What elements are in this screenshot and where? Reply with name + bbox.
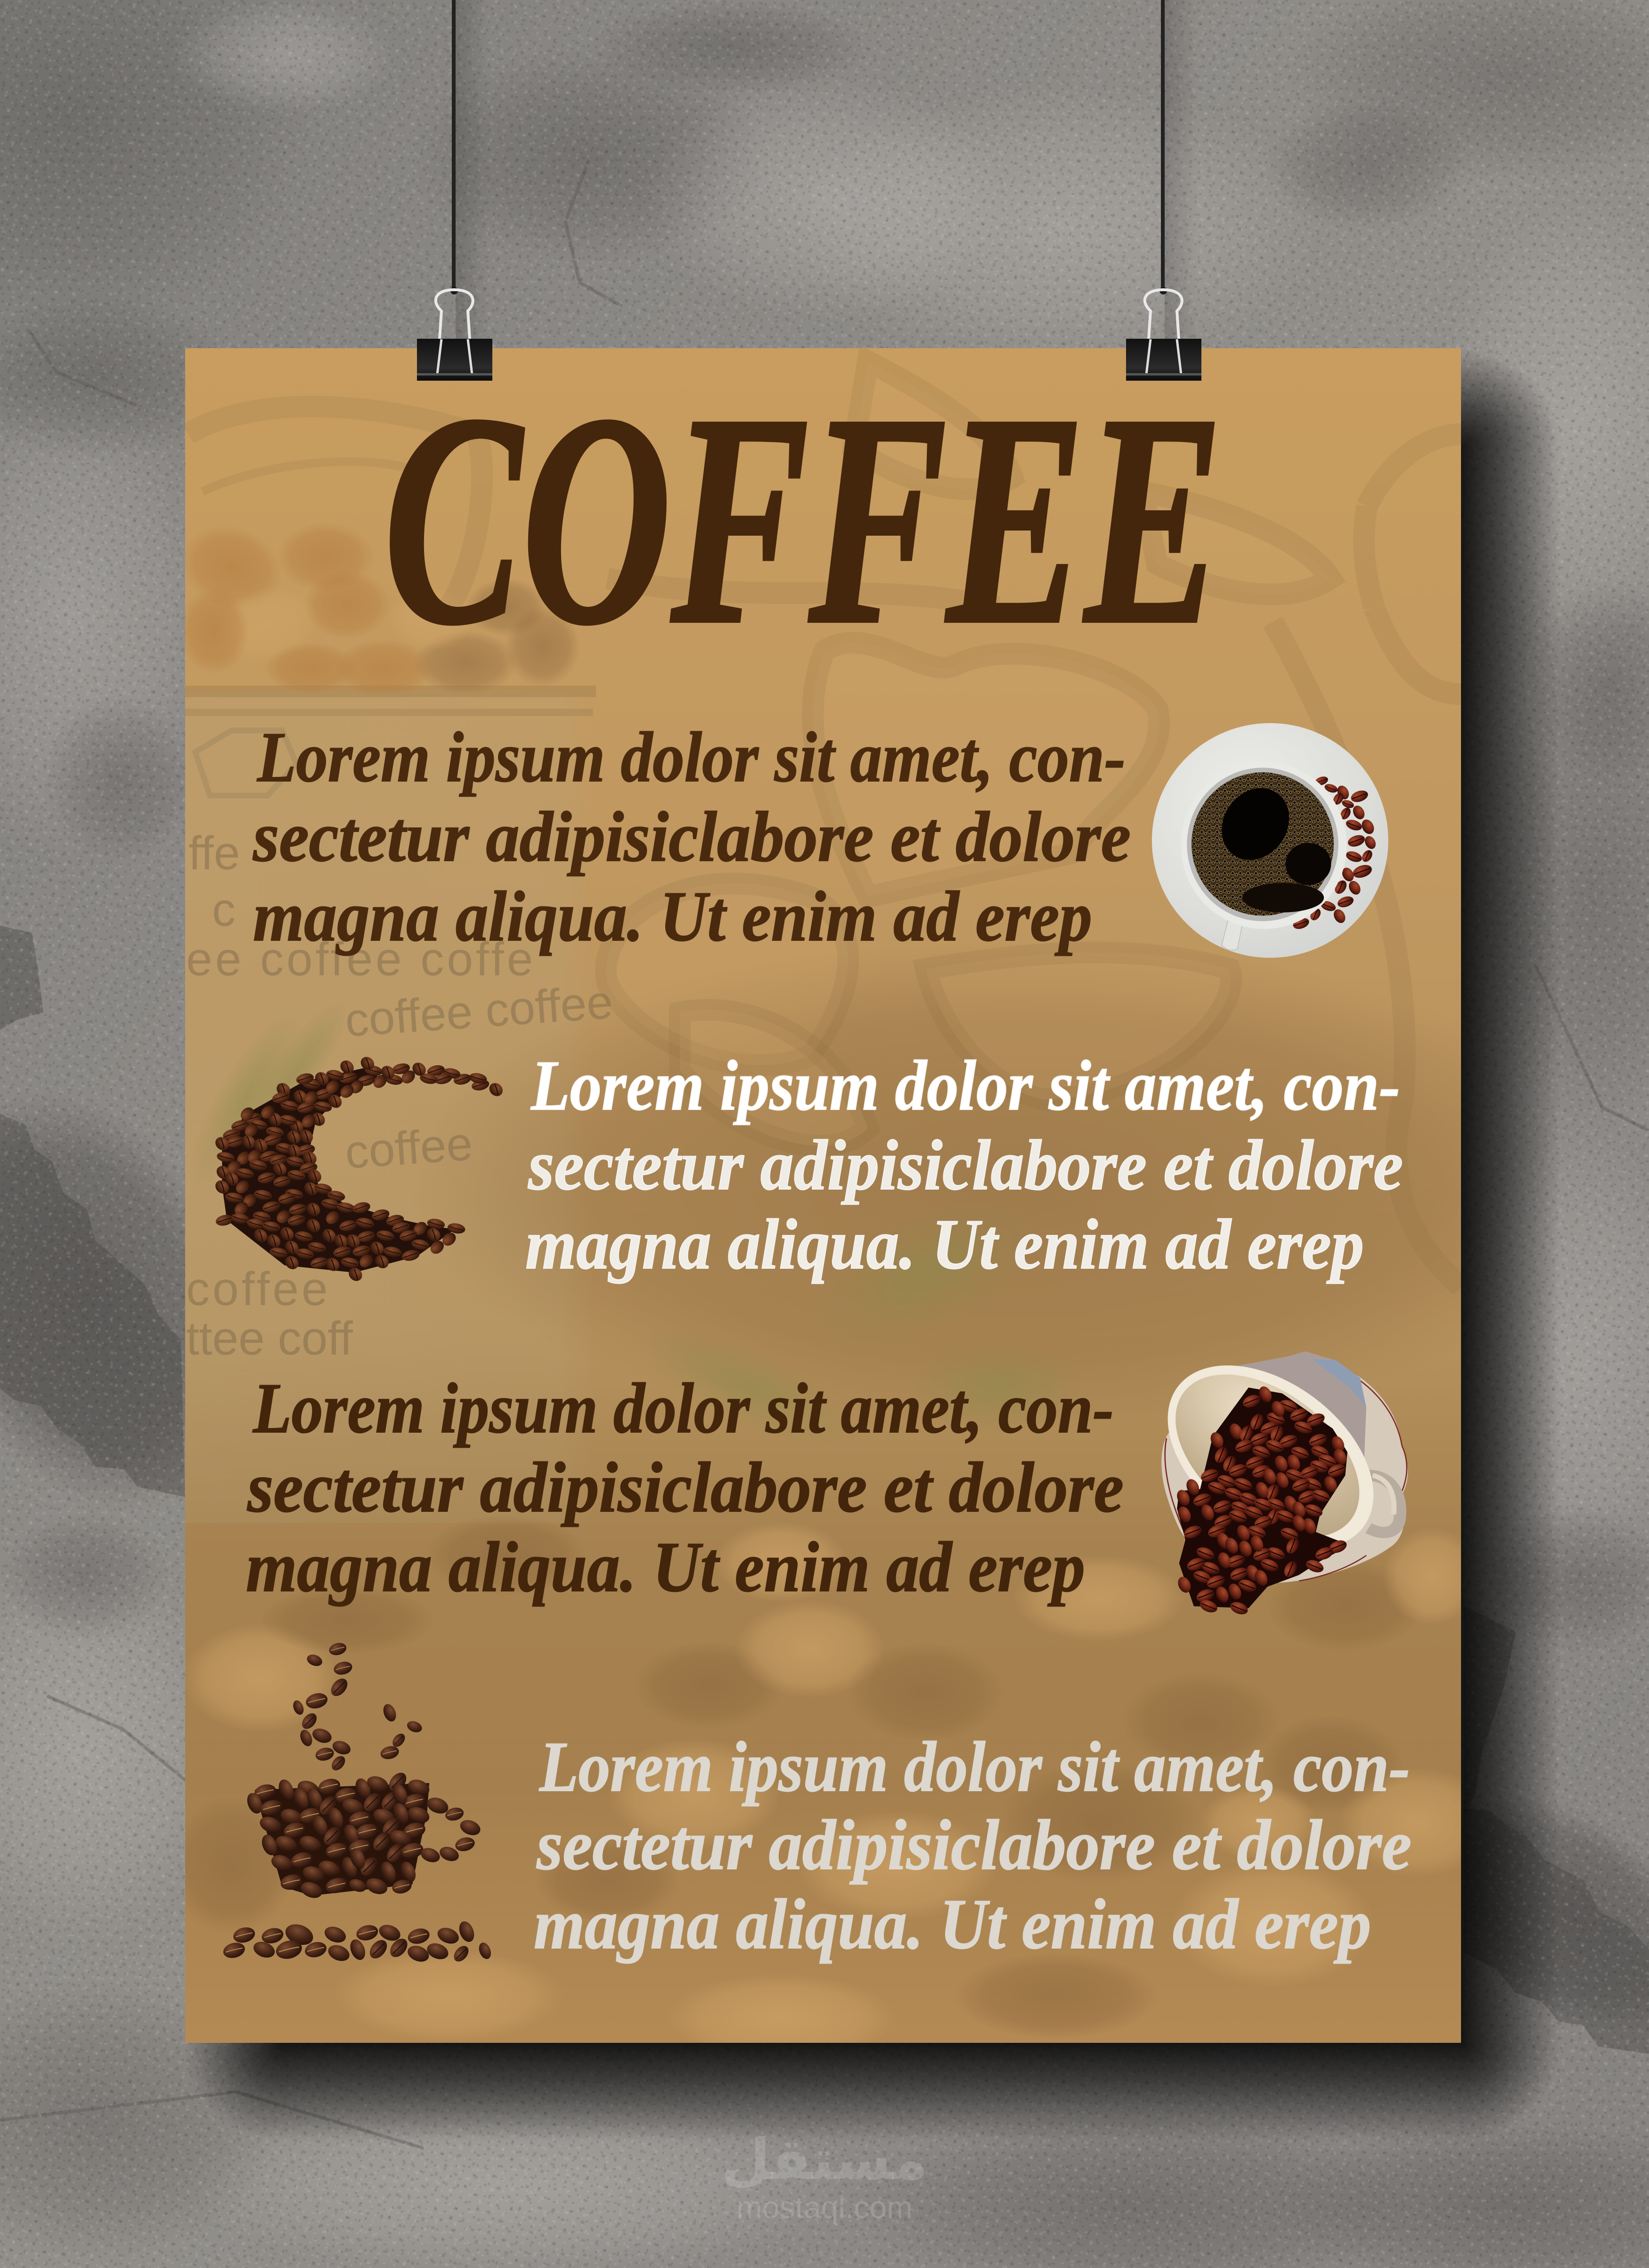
text block 3: Lorem ipsum dolor sit amet, con- — [252, 1369, 1114, 1448]
text block 1: Lorem ipsum dolor sit amet, con- — [256, 718, 1126, 797]
text block 4: Lorem ipsum dolor sit amet, con- — [539, 1727, 1410, 1806]
faded "coffee" lettering on canister: ee coffee coffe — [186, 933, 536, 986]
poster sheet with faded coffee artwork — [185, 348, 1461, 2043]
faded "coffee" lettering on canister: c — [212, 883, 236, 936]
icon: tipped cup spilling beans — [1130, 1330, 1411, 1617]
beans on saucer — [1291, 775, 1378, 931]
text block 2 — [525, 1046, 1403, 1284]
faded "coffee" lettering on canister: coffee — [186, 1263, 331, 1315]
binder clip left with hanging wire — [417, 0, 492, 381]
dark damp patches — [0, 926, 1649, 2054]
text block 2: magna aliqua. Ut enim ad erep — [525, 1205, 1364, 1284]
text block 3 — [246, 1369, 1124, 1607]
binder clip right with hanging wire — [1126, 0, 1201, 381]
text block 2: sectetur adipisiclabore et dolore — [528, 1126, 1403, 1205]
cup rim — [1181, 762, 1347, 929]
text block 2: Lorem ipsum dolor sit amet, con- — [530, 1046, 1400, 1125]
background artwork: beans and flower motif — [168, 362, 1620, 2061]
faded "coffee" lettering on canister: ffe — [188, 827, 240, 880]
text block 1: magna aliqua. Ut enim ad erep — [253, 877, 1092, 956]
lower out-of-focus beans — [168, 1514, 1495, 2061]
watermark — [721, 2127, 928, 2225]
text block 1 — [253, 718, 1131, 956]
faded "coffee" lettering on canister: ttee coff — [186, 1312, 353, 1365]
cup rim and interior — [1130, 1330, 1411, 1584]
green plant — [170, 986, 1088, 1475]
flower motif — [188, 362, 1464, 1287]
faded "coffee" lettering on canister: coffee coffee — [343, 976, 614, 1047]
text block 3: sectetur adipisiclabore et dolore — [247, 1448, 1124, 1527]
saucer — [1152, 723, 1388, 958]
text block 4: sectetur adipisiclabore et dolore — [536, 1805, 1412, 1885]
cup handle — [1222, 921, 1242, 950]
faded "coffee" lettering on canister: coffee — [343, 1117, 474, 1179]
watermark: mostaql.com — [736, 2190, 913, 2225]
text block 4: magna aliqua. Ut enim ad erep — [534, 1885, 1371, 1964]
text block 4 — [534, 1727, 1412, 1964]
title: COFFEE — [384, 353, 1223, 686]
faded "coffee" lettering on canister — [186, 827, 614, 1365]
pile of beans — [1177, 1387, 1347, 1608]
cup handle — [1368, 1476, 1400, 1533]
coffee surface — [1192, 772, 1334, 916]
text block 1: sectetur adipisiclabore et dolore — [253, 797, 1131, 876]
cup body — [1236, 1351, 1366, 1460]
icon: coffee cup made of beans with steam and saucer — [222, 1641, 493, 1965]
icon: coffee cup on saucer from above — [1152, 723, 1388, 958]
canister panel — [185, 685, 1461, 2042]
upper-left beans — [169, 511, 580, 697]
icon: crescent of coffee beans — [213, 1056, 505, 1282]
poster drop shadow — [184, 349, 1560, 2142]
watermark: مستقل — [721, 2127, 928, 2193]
text block 3: magna aliqua. Ut enim ad erep — [246, 1527, 1085, 1607]
saucer — [1161, 1376, 1408, 1583]
